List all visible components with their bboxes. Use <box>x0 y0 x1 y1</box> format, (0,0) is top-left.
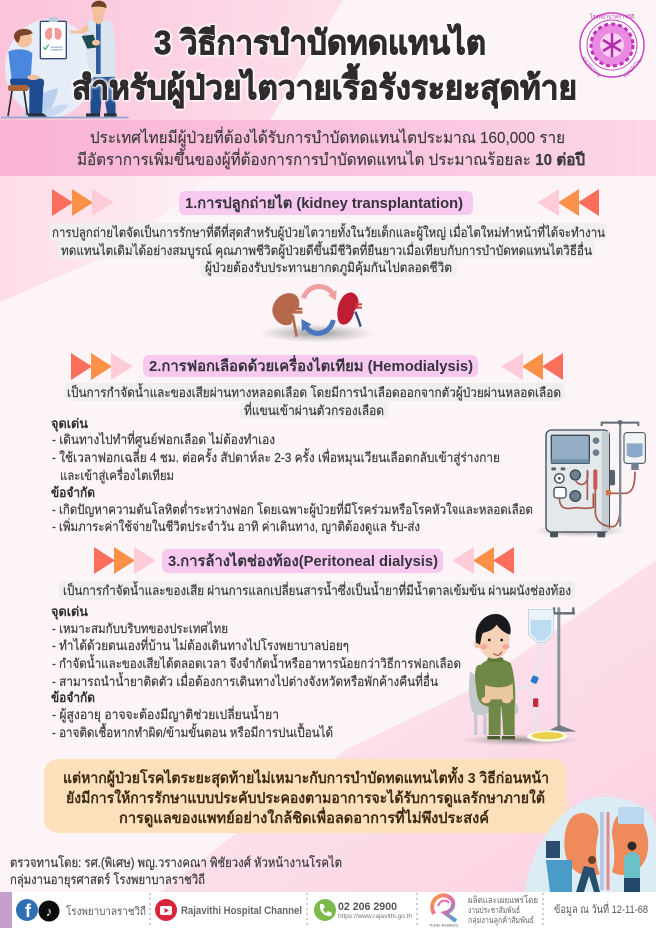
heading pill <box>179 191 473 215</box>
section 1: kidney transplantation <box>49 189 607 343</box>
highlights and limitations: - ใช้เวลาฟอกเฉลี่ย 4 ชม. ต่อครั้ง สัปดาห์ละ 2-3 ครั้ง เพื่อหมุนเวียนเลือดกลับเข้าสู่ร่างกาย <box>52 448 500 466</box>
arrows left <box>94 547 156 574</box>
credit <box>10 855 342 888</box>
arrows left <box>71 353 133 380</box>
logo: public relations <box>430 895 458 928</box>
highlights and limitations <box>51 604 461 740</box>
highlights and limitations: - เกิดปัญหาความดันโลหิตต่ำระหว่างฟอก โดยเฉพาะผู้ป่วยที่มีโรคร่วมหรือโรคหัวใจและหลอดเลือด <box>52 501 533 518</box>
heading pill: 1.การปลูกถ่ายไต (kidney transplantation) <box>185 193 463 213</box>
producer: ผลิตและเผยแพร่โดย <box>468 895 538 905</box>
icon: tiktok <box>38 900 60 922</box>
icon: facebook: f <box>25 901 32 921</box>
hospital logo: RAJAVITHI <box>580 56 601 79</box>
hospital logo: HOSPITAL <box>623 57 644 79</box>
callout: palliative care: ยังมีการให้การรักษาแบบประคับประคองตามอาการจะได้รับการดูแลรักษาภายใต้ <box>66 788 545 808</box>
description: เป็นการกำจัดน้ำและของเสียผ่านทางหลอดเลือด โดยมีการนำเลือดออกจากตัวผู้ป่วยผ่านหลอดเลือด <box>67 383 561 401</box>
title: สำหรับผู้ป่วยไตวายเรื้อรังระยะสุดท้าย <box>72 63 577 109</box>
icon: tiktok: ♪ <box>46 904 52 919</box>
highlights and limitations: จุดเด่น <box>51 604 88 620</box>
description: เป็นการกำจัดน้ำและของเสีย ผ่านการแลกเปลี่ยนสารน้ำซึ่งเป็นน้ำยาที่มีน้ำตาลเข้มข้น ผ่านผนังช่องท้อง <box>63 581 571 598</box>
arrows left <box>52 189 114 216</box>
title <box>72 23 577 109</box>
icon: patient on peritoneal dialysis <box>458 607 582 746</box>
icon: facebook <box>16 899 38 921</box>
logo: public relations: Public Relations <box>430 922 458 928</box>
intro banner: มีอัตราการเพิ่มขึ้นของผู้ที่ต้องการการบำบัดทดแทนไต ประมาณร้อยละ 10 ต่อปี <box>77 148 585 170</box>
heading pill <box>162 549 443 573</box>
producer <box>468 895 538 926</box>
highlights and limitations <box>51 416 533 535</box>
footer bar <box>0 892 656 928</box>
credit: ตรวจทานโดย: รศ.(พิเศษ) พญ.วรางคณา พิชัยวงศ์ หัวหน้างานโรคไต <box>10 855 342 870</box>
callout: palliative care: แต่หากผู้ป่วยโรคไตระยะสุดท้ายไม่เหมาะกับการบำบัดทดแทนไตทั้ง 3 วิธีก่อนหน้า <box>63 766 549 788</box>
description <box>49 223 607 277</box>
arrows right <box>537 189 599 216</box>
highlights and limitations: - สามารถนำน้ำยาติดตัว เมื่อต้องการเดินทางไปต่างจังหวัดหรือพักค้างคืนที่อื่น <box>52 672 438 689</box>
producer: กลุ่มงานลูกค้าสัมพันธ์ <box>468 915 534 926</box>
contact <box>338 901 412 920</box>
highlights and limitations: - เหมาะสมกับบริบทของประเทศไทย <box>52 621 228 636</box>
contact: 02 206 2900 <box>338 901 397 913</box>
hospital logo: โรงพยาบาลราชวิถี <box>590 12 634 20</box>
producer: งานประชาสัมพันธ์ <box>468 905 520 915</box>
callout: palliative care: การดูแลของแพทย์อย่างใกล้ชิดเพื่อลดอาการที่ไม่พึงประสงค์ <box>119 807 489 828</box>
highlights and limitations: - ทำได้ด้วยตนเองที่บ้าน ไม่ต้องเดินทางไปโรงพยาบาลบ่อยๆ <box>52 637 349 653</box>
icon: youtube <box>155 899 177 921</box>
highlights and limitations: - อาจติดเชื้อหากทำผิด/ข้ามขั้นตอน หรือมีการปนเปื้อนได้ <box>52 723 333 740</box>
highlights and limitations: ข้อจำกัด <box>51 485 95 500</box>
callout: palliative care <box>44 759 567 833</box>
highlights and limitations: ข้อจำกัด <box>51 690 95 705</box>
heading pill: 3.การล้างไตช่องท้อง(Peritoneal dialysis) <box>168 551 438 570</box>
highlights and limitations: และเข้าสู่เครื่องไตเทียม <box>60 467 174 484</box>
icon: dialysis machine <box>532 420 645 537</box>
label: youtube channel: Rajavithi Hospital Channel <box>181 905 302 917</box>
highlights and limitations: - เพิ่มภาระค่าใช้จ่ายในชีวิตประจำวัน อาทิ ค่าเดินทาง, ญาติต้องดูแล รับ-ส่ง <box>52 518 420 535</box>
title: 3 วิธีการบำบัดทดแทนไต <box>154 23 486 61</box>
doctor <box>69 1 117 117</box>
section 2: hemodialysis <box>51 353 645 537</box>
highlights and limitations: - ผู้สูงอายุ อาจจะต้องมีญาติช่วยเปลี่ยนน้ำยา <box>52 705 279 723</box>
highlights and limitations: จุดเด่น <box>51 416 88 432</box>
label: hospital page: โรงพยาบาลราชวิถี <box>66 904 146 918</box>
highlights and limitations: - กำจัดน้ำและของเสียได้ตลอดเวลา จึงจำกัดน้ำหรืออาหารน้อยกว่าวิธีการฟอกเลือด <box>52 654 461 671</box>
intro banner: ประเทศไทยมีผู้ป่วยที่ต้องได้รับการบำบัดทดแทนไตประมาณ 160,000 ราย <box>90 126 565 148</box>
description <box>64 383 565 419</box>
illustration: doctor and patient <box>1 1 129 118</box>
description: ผู้ป่วยต้องรับประทานยากดภูมิคุ้มกันไปตลอดชีวิต <box>205 260 452 276</box>
illustration: kidneys with doctors <box>525 797 656 892</box>
intro banner <box>0 120 656 176</box>
description: ทดแทนไตเดิมได้อย่างสมบูรณ์ คุณภาพชีวิตผู้ป่วยดีขึ้นมีชีวิตที่ยืนยาวเมื่อเทียบกับการบำบัดทดแทนไตวิธีอื่น <box>61 241 592 259</box>
clipboard <box>40 17 66 59</box>
hospital logo <box>580 12 644 79</box>
arrows right <box>501 353 563 380</box>
highlights and limitations: - เดินทางไปทำที่ศูนย์ฟอกเลือด ไม่ต้องทำเอง <box>52 431 275 448</box>
description: ที่แขนเข้าผ่านตัวกรองเลือด <box>244 402 384 418</box>
credit: กลุ่มงานอายุรศาสตร์ โรงพยาบาลราชวิถี <box>10 872 205 888</box>
arrows right <box>452 547 514 574</box>
icon: kidney swap <box>258 286 375 343</box>
patient <box>8 29 47 117</box>
section 3: peritoneal dialysis <box>51 547 582 746</box>
heading pill: 2.การฟอกเลือดด้วยเครื่องไตเทียม (Hemodialysis) <box>149 355 473 375</box>
contact: https://www.rajavithi.go.th <box>338 914 412 920</box>
icon: phone <box>314 899 336 921</box>
